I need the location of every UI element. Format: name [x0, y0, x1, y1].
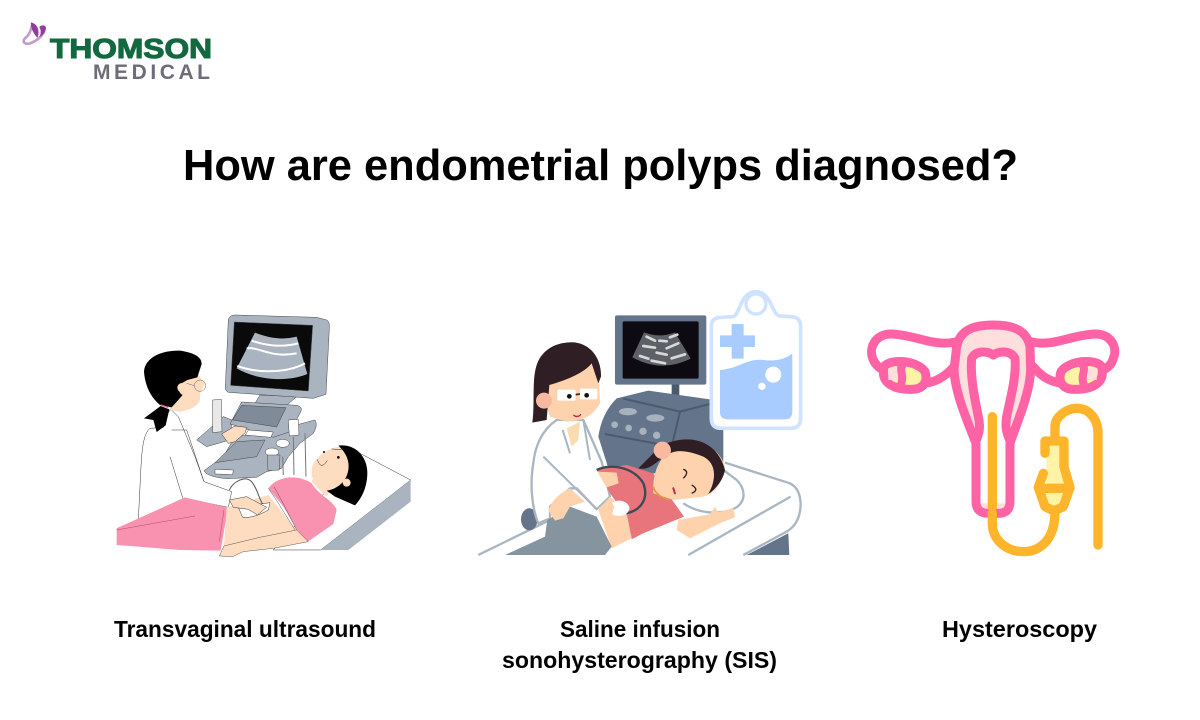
monitor — [615, 315, 706, 403]
label: saline infusion sonohysterography: sonohysterography (SIS) — [502, 647, 777, 673]
logo: Thomson Medical — [24, 23, 212, 84]
label: transvaginal ultrasound: Transvaginal ultrasound — [114, 616, 376, 642]
uterine cavity — [971, 352, 1015, 503]
logo wordmark: Medical: MEDICAL — [93, 61, 210, 84]
right ovary — [1060, 361, 1102, 389]
doctor head — [532, 342, 601, 423]
ultrasound probe and hand — [229, 479, 270, 517]
uterus fill — [954, 325, 1031, 513]
title: How are endometrial polyps diagnosed? — [183, 141, 1018, 190]
doctor coat — [521, 420, 610, 530]
illustration: saline infusion sonohysterography — [478, 292, 801, 555]
icon: saline bag — [711, 292, 801, 428]
patient — [505, 439, 735, 555]
logo wordmark: Thomson: THOMSON — [50, 33, 212, 64]
illustration: hysteroscopy — [872, 325, 1115, 552]
fallopian tubes — [872, 334, 1115, 383]
ultrasound machine body — [598, 391, 723, 473]
ultrasound probe and cable — [597, 467, 645, 517]
label: saline infusion sonohysterography — [502, 616, 777, 673]
illustration: transvaginal ultrasound — [117, 315, 411, 557]
uterus outline — [954, 325, 1031, 513]
left ovary — [883, 361, 926, 389]
hysteroscope probe — [992, 408, 1098, 552]
bed — [273, 453, 411, 550]
label: saline infusion sonohysterography: Saline infusion — [560, 616, 720, 642]
doctor — [138, 351, 247, 520]
ultrasound machine — [197, 315, 329, 479]
label: hysteroscopy: Hysteroscopy — [942, 616, 1097, 642]
icon: butterfly — [24, 23, 46, 44]
patient — [117, 445, 367, 557]
examination bed — [478, 463, 801, 555]
